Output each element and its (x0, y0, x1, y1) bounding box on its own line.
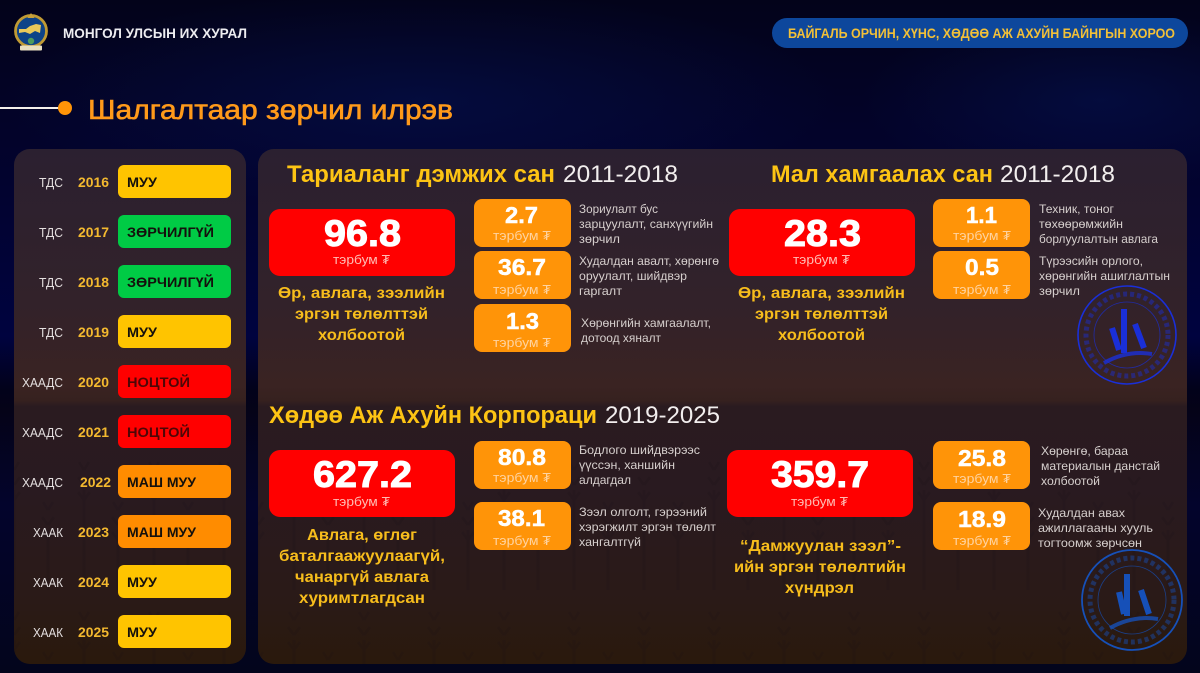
row 2017: 2017 (78, 224, 109, 240)
total caption: эргэн төлөлттэй (295, 306, 428, 323)
row 2016 (39, 165, 231, 198)
total card 28.3: тэрбум ₮ (793, 252, 850, 267)
row 2022: МАШ МУУ (127, 474, 196, 490)
item 36.7: гаргалт (579, 284, 623, 298)
item 80.8: тэрбум ₮ (493, 470, 551, 485)
row 2019: 2019 (78, 324, 109, 340)
item 1.3: 1.3 (506, 308, 539, 334)
total caption: баталгаажуулаагүй, (279, 548, 445, 565)
heading: Хөдөө Аж Ахуйн Корпораци (269, 402, 597, 429)
total caption (278, 285, 445, 344)
total card 627.2 (269, 450, 455, 517)
item 1.3: Хөрөнгийн хамгаалалт, (581, 316, 711, 330)
row 2017 (39, 215, 231, 248)
total caption: “Дамжуулан зээл”- (740, 538, 901, 555)
row 2025 (33, 615, 231, 648)
item 1.1: Техник, тоног (1039, 202, 1115, 216)
item 0.5: Түрээсийн орлого, (1039, 254, 1143, 268)
row 2021: ХААДС (22, 425, 63, 440)
total card 96.8: 96.8 (324, 213, 401, 254)
row 2023: 2023 (78, 524, 109, 540)
item 25.8: Хөрөнгө, бараа (1041, 444, 1128, 458)
item 18.9: тогтоомж зөрчсөн (1038, 536, 1142, 550)
item 18.9: Худалдан авах (1038, 506, 1125, 520)
item 38.1: хангалтгүй (579, 535, 641, 549)
total caption: холбоотой (778, 327, 865, 344)
item 0.5: хөрөнгийн ашиглалтын (1039, 269, 1170, 283)
row 2019 (39, 315, 231, 348)
total caption: хуримтлагдсан (299, 590, 425, 607)
row 2016: 2016 (78, 174, 109, 190)
total card 28.3: 28.3 (784, 213, 861, 254)
item 1.1: төхөөрөмжийн (1039, 217, 1123, 231)
total caption: эргэн төлөлттэй (755, 306, 888, 323)
total card 96.8 (269, 209, 455, 276)
item 38.1: тэрбум ₮ (493, 533, 551, 548)
committee name pill (772, 18, 1188, 48)
total caption (734, 538, 906, 597)
item 1.3 (474, 304, 711, 352)
row 2023: МАШ МУУ (127, 524, 196, 540)
heading (287, 161, 678, 188)
row 2019: ТДС (39, 325, 63, 340)
total card 359.7 (727, 450, 913, 517)
total card 359.7: тэрбум ₮ (791, 494, 848, 509)
panel: audit findings (258, 149, 1187, 664)
row 2017: ТДС (39, 225, 63, 240)
item 36.7: оруулалт, шийдвэр (579, 269, 687, 283)
item 0.5: 0.5 (965, 254, 999, 280)
item 25.8: 25.8 (958, 445, 1006, 471)
total card 359.7: 359.7 (771, 454, 869, 495)
section: agriculture corporation (269, 402, 1182, 650)
row 2022: ХААДС (22, 475, 63, 490)
item 1.1: тэрбум ₮ (953, 228, 1011, 243)
row 2021 (22, 415, 231, 448)
row 2020: 2020 (78, 374, 109, 390)
item 38.1: хэрэгжилт эргэн төлөлт (579, 520, 717, 534)
row 2025: 2025 (78, 624, 109, 640)
total caption: холбоотой (318, 327, 405, 344)
committee name pill: БАЙГАЛЬ ОРЧИН, ХҮНС, ХӨДӨӨ АЖ АХУЙН БАЙНГЫН ХОРОО (788, 26, 1175, 41)
item 25.8: холбоотой (1041, 474, 1100, 488)
heading: 2011-2018 (1000, 161, 1115, 188)
item 36.7: тэрбум ₮ (493, 282, 551, 297)
row 2025: МУУ (127, 624, 157, 640)
item 2.7 (474, 199, 713, 247)
total card 96.8: тэрбум ₮ (333, 252, 390, 267)
total caption (738, 285, 905, 344)
row 2021: 2021 (78, 424, 109, 440)
item 2.7: 2.7 (505, 202, 538, 228)
heading: 2019-2025 (605, 402, 720, 429)
item 25.8 (933, 441, 1160, 489)
total caption (279, 527, 445, 607)
total caption: хүндрэл (785, 580, 854, 597)
item 18.9: тэрбум ₮ (953, 533, 1011, 548)
row 2020 (22, 365, 231, 398)
item 1.1: 1.1 (966, 202, 997, 228)
title with line marker: Шалгалтаар зөрчил илрэв (88, 94, 453, 125)
organisation name: МОНГОЛ УЛСЫН ИХ ХУРАЛ (63, 25, 247, 41)
row 2019: МУУ (127, 324, 157, 340)
row 2020: НОЦТОЙ (127, 373, 190, 390)
row 2018: 2018 (78, 274, 109, 290)
item 2.7: тэрбум ₮ (493, 228, 551, 243)
item 38.1: 38.1 (498, 505, 545, 531)
row 2024: ХААК (33, 575, 63, 590)
item 80.8: Бодлого шийдвэрээс (579, 443, 700, 457)
item 2.7: зарцуулалт, санхүүгийн (579, 217, 713, 231)
icon: blue stamp (1082, 550, 1182, 650)
item 2.7: Зориулалт бус (579, 202, 658, 216)
item 36.7: 36.7 (498, 254, 546, 280)
item 1.1: борлуулалтын авлага (1039, 232, 1158, 246)
row 2022 (22, 465, 231, 498)
heading: Мал хамгаалах сан (771, 161, 993, 188)
row 2024 (33, 565, 231, 598)
item 80.8 (474, 441, 700, 489)
item 36.7 (474, 251, 719, 299)
total caption: чанаргүй авлага (295, 569, 429, 586)
total card 627.2: 627.2 (313, 454, 412, 495)
total caption: Авлага, өглөг (307, 527, 417, 544)
row 2018 (39, 265, 231, 298)
row 2025: ХААК (33, 625, 63, 640)
row 2018: ТДС (39, 275, 63, 290)
item 25.8: тэрбум ₮ (953, 471, 1011, 486)
row 2016: ТДС (39, 175, 63, 190)
total card 28.3 (729, 209, 915, 276)
row 2018: ЗӨРЧИЛГҮЙ (127, 273, 214, 290)
item 0.5: зөрчил (1039, 284, 1080, 298)
section: crop support fund (269, 161, 719, 352)
item 0.5 (933, 251, 1170, 299)
row 2023 (33, 515, 231, 548)
total caption: Өр, авлага, зээлийн (278, 285, 445, 302)
row 2021: НОЦТОЙ (127, 423, 190, 440)
item 38.1 (474, 502, 717, 550)
total card 627.2: тэрбум ₮ (333, 494, 390, 509)
item 36.7: Худалдан авалт, хөрөнгө (579, 254, 719, 268)
item 18.9 (933, 502, 1153, 550)
section: livestock protection fund (729, 161, 1176, 384)
item 80.8: үүссэн, ханшийн (579, 458, 675, 472)
item 1.1 (933, 199, 1158, 247)
item 1.3: дотоод хяналт (581, 331, 661, 345)
icon: state emblem (16, 13, 46, 50)
row 2024: МУУ (127, 574, 157, 590)
heading: Тариаланг дэмжих сан (287, 161, 555, 188)
panel: yearly audit ratings (14, 149, 246, 664)
row 2024: 2024 (78, 574, 109, 590)
icon: blue stamp (1078, 286, 1176, 384)
row 2016: МУУ (127, 174, 157, 190)
item 80.8: алдагдал (579, 473, 631, 487)
item 0.5: тэрбум ₮ (953, 282, 1011, 297)
header: parliament emblem and name (16, 13, 247, 50)
row 2023: ХААК (33, 525, 63, 540)
item 38.1: Зээл олголт, гэрээний (579, 505, 707, 519)
row 2017: ЗӨРЧИЛГҮЙ (127, 223, 214, 240)
item 18.9: ажиллагааны хууль (1038, 521, 1153, 535)
heading (771, 161, 1115, 188)
heading: 2011-2018 (563, 161, 678, 188)
item 80.8: 80.8 (498, 444, 546, 470)
total caption: ийн эргэн төлөлтийн (734, 559, 906, 576)
item 25.8: материалын данстай (1041, 459, 1160, 473)
total caption: Өр, авлага, зээлийн (738, 285, 905, 302)
item 18.9: 18.9 (958, 506, 1006, 532)
row 2020: ХААДС (22, 375, 63, 390)
row 2022: 2022 (80, 474, 111, 490)
item 2.7: зөрчил (579, 232, 620, 246)
item 1.3: тэрбум ₮ (493, 335, 551, 350)
